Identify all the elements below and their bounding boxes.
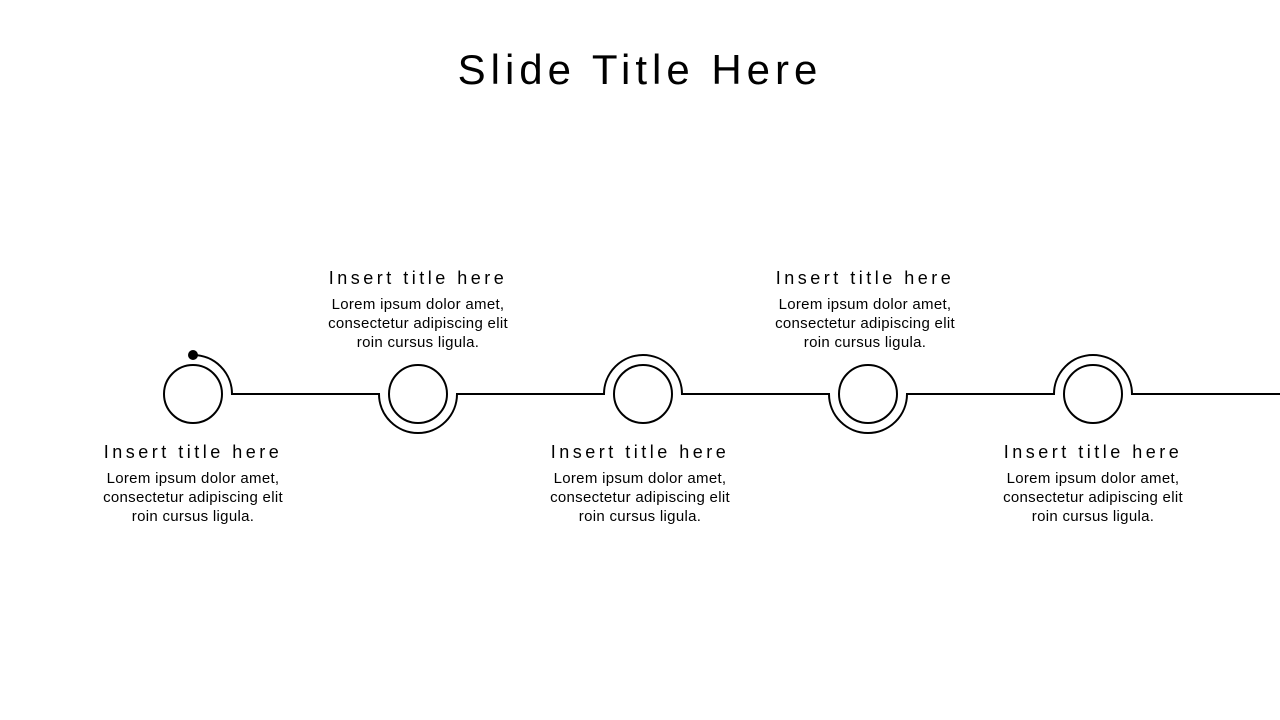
text block 2: roin cursus ligula.	[357, 334, 479, 351]
text block 2: consectetur adipiscing elit	[328, 315, 508, 332]
text block 3: roin cursus ligula.	[579, 508, 701, 525]
text block 4: roin cursus ligula.	[804, 334, 926, 351]
start dot	[188, 350, 198, 360]
text block 5: Lorem ipsum dolor amet,	[1007, 470, 1179, 487]
text block 1: Lorem ipsum dolor amet,	[107, 470, 279, 487]
text block 4	[775, 268, 955, 351]
text block 5: Insert title here	[1004, 442, 1182, 462]
text block 2	[328, 268, 508, 351]
text block 5: roin cursus ligula.	[1032, 508, 1154, 525]
text block 4: Lorem ipsum dolor amet,	[779, 296, 951, 313]
text block 3	[550, 442, 730, 525]
text block 2: Insert title here	[329, 268, 507, 288]
timeline path	[193, 355, 1280, 433]
text block 5	[1003, 442, 1183, 525]
node circles	[164, 365, 1122, 423]
text block 5: consectetur adipiscing elit	[1003, 489, 1183, 506]
text block 1: Insert title here	[104, 442, 282, 462]
text block 2: Lorem ipsum dolor amet,	[332, 296, 504, 313]
text block 3: Lorem ipsum dolor amet,	[554, 470, 726, 487]
text block 3: Insert title here	[551, 442, 729, 462]
text block 4: Insert title here	[776, 268, 954, 288]
text block 1: roin cursus ligula.	[132, 508, 254, 525]
title: Slide Title Here	[458, 46, 822, 93]
text block 4: consectetur adipiscing elit	[775, 315, 955, 332]
text block 1	[103, 442, 283, 525]
text block 1: consectetur adipiscing elit	[103, 489, 283, 506]
text block 3: consectetur adipiscing elit	[550, 489, 730, 506]
